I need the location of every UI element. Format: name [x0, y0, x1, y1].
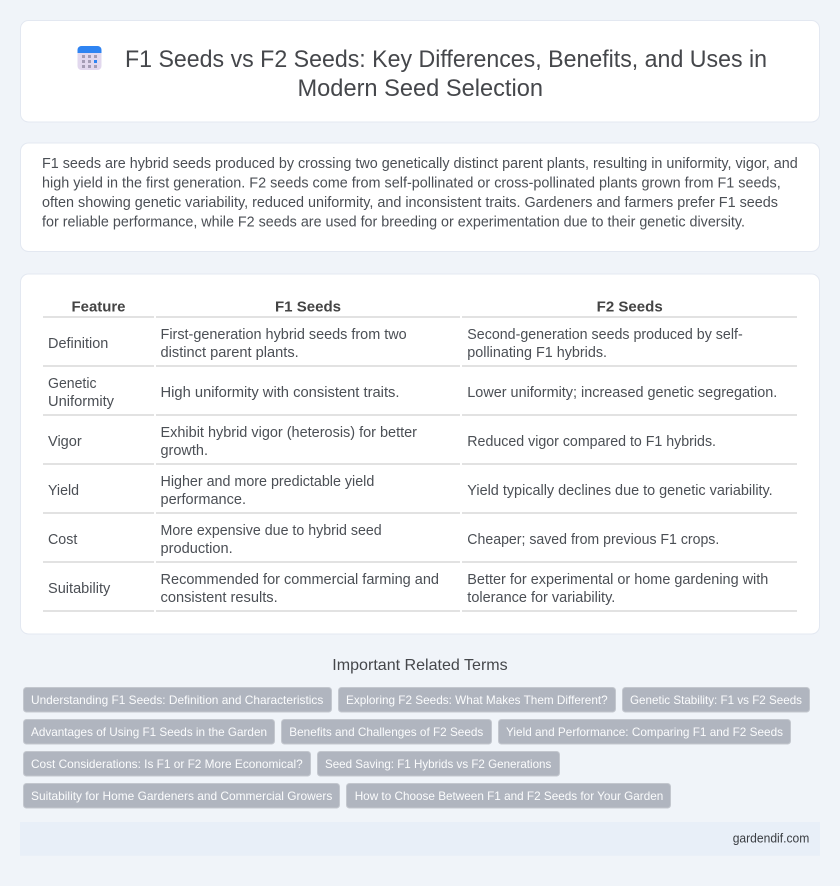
text block: summary paragraph: [42, 156, 798, 230]
table row: suitability: consistent results.: [160, 590, 278, 606]
tag row 3: Cost Considerations: Is F1 or F2 More Economical?: [31, 757, 303, 771]
table row: vigor: growth.: [160, 443, 208, 459]
table row: genetic uniformity: [43, 376, 797, 416]
table row: definition: Definition: [48, 336, 108, 352]
table row: cost: Cheaper; saved from previous F1 crops.: [467, 532, 719, 548]
table header: F1 Seeds: [275, 300, 341, 316]
table row: genetic uniformity: Lower uniformity; increased genetic segregation.: [467, 385, 777, 401]
tag row 2: [24, 720, 790, 744]
tag row 2: Benefits and Challenges of F2 Seeds: [289, 725, 483, 739]
tag row 4: Suitability for Home Gardeners and Commercial Growers: [31, 789, 332, 803]
table row: suitability: Recommended for commercial farming and: [160, 572, 439, 588]
table row: definition: First-generation hybrid seeds from two: [160, 327, 407, 343]
panel: introduction: [20, 143, 820, 252]
table row: suitability: tolerance for variability.: [467, 590, 615, 606]
table row: definition: Second-generation seeds produced by self-: [467, 327, 743, 343]
tag row 4: How to Choose Between F1 and F2 Seeds for Your Garden: [355, 789, 663, 803]
text block: summary paragraph: F1 seeds are hybrid seeds produced by crossing two genetically distinct parent plants, resulting in uniformity, vigor, and: [42, 156, 798, 172]
table row: yield: Higher and more predictable yield: [160, 474, 374, 490]
table row: vigor: Reduced vigor compared to F1 hybrids.: [467, 434, 716, 450]
table row: suitability: Suitability: [48, 581, 111, 597]
tag row 3: [24, 752, 560, 776]
title: Modern Seed Selection: [298, 75, 543, 102]
title: [125, 46, 767, 102]
table header: [43, 300, 797, 318]
table header: Feature: [72, 300, 126, 316]
table row: definition: distinct parent plants.: [160, 345, 299, 361]
text block: summary paragraph: high yield in the first generation. F2 seeds come from self-pollinated or cross-pollinated plants grown from F1 seeds,: [42, 176, 781, 192]
table row: cost: Cost: [48, 532, 77, 548]
panel: header: [20, 20, 820, 122]
table row: definition: [43, 327, 797, 367]
table row: genetic uniformity: Uniformity: [48, 394, 115, 410]
table row: genetic uniformity: High uniformity with consistent traits.: [160, 385, 400, 401]
title: F1 Seeds vs F2 Seeds: Key Differences, Benefits, and Uses in: [125, 46, 767, 73]
table row: definition: pollinating F1 hybrids.: [467, 345, 607, 361]
table row: suitability: Better for experimental or home gardening with: [467, 572, 768, 588]
panel: related term tags: [24, 688, 810, 808]
table row: yield: Yield: [48, 483, 79, 499]
tag row 1: [24, 688, 810, 712]
table row: cost: More expensive due to hybrid seed: [160, 523, 382, 539]
tag row 2: Yield and Performance: Comparing F1 and F2 Seeds: [506, 725, 783, 739]
tag row 1: Understanding F1 Seeds: Definition and Characteristics: [31, 693, 323, 707]
table row: vigor: Vigor: [48, 434, 82, 450]
table row: vigor: [43, 425, 797, 465]
table row: yield: performance.: [160, 492, 246, 508]
tag row 1: Exploring F2 Seeds: What Makes Them Different?: [346, 693, 608, 707]
table row: genetic uniformity: Genetic: [48, 376, 96, 392]
table row: yield: [43, 474, 797, 514]
tag row 4: [24, 784, 670, 808]
table row: suitability: [43, 572, 797, 612]
tag row 1: Genetic Stability: F1 vs F2 Seeds: [630, 693, 802, 707]
text block: summary paragraph: for reliable performance, while F2 seeds are used for breeding or experimentation due to their genetic diversity.: [42, 214, 745, 230]
heading: important related terms: Important Related Terms: [332, 657, 508, 674]
panel: comparison table: [20, 274, 820, 634]
footer: gardendif.com: [733, 831, 809, 846]
table header: F2 Seeds: [597, 300, 663, 316]
table row: cost: production.: [160, 541, 233, 557]
footer: [20, 822, 820, 856]
icon: calendar: [78, 46, 102, 70]
text block: summary paragraph: often showing genetic variability, reduced uniformity, and inconsistent traits. Gardeners and farmers prefer F1 seeds: [42, 195, 778, 211]
tag row 3: Seed Saving: F1 Hybrids vs F2 Generations: [325, 757, 551, 771]
table row: cost: [43, 523, 797, 563]
table row: vigor: Exhibit hybrid vigor (heterosis) for better: [160, 425, 417, 441]
table row: yield: Yield typically declines due to genetic variability.: [467, 483, 773, 499]
tag row 2: Advantages of Using F1 Seeds in the Garden: [31, 725, 267, 739]
